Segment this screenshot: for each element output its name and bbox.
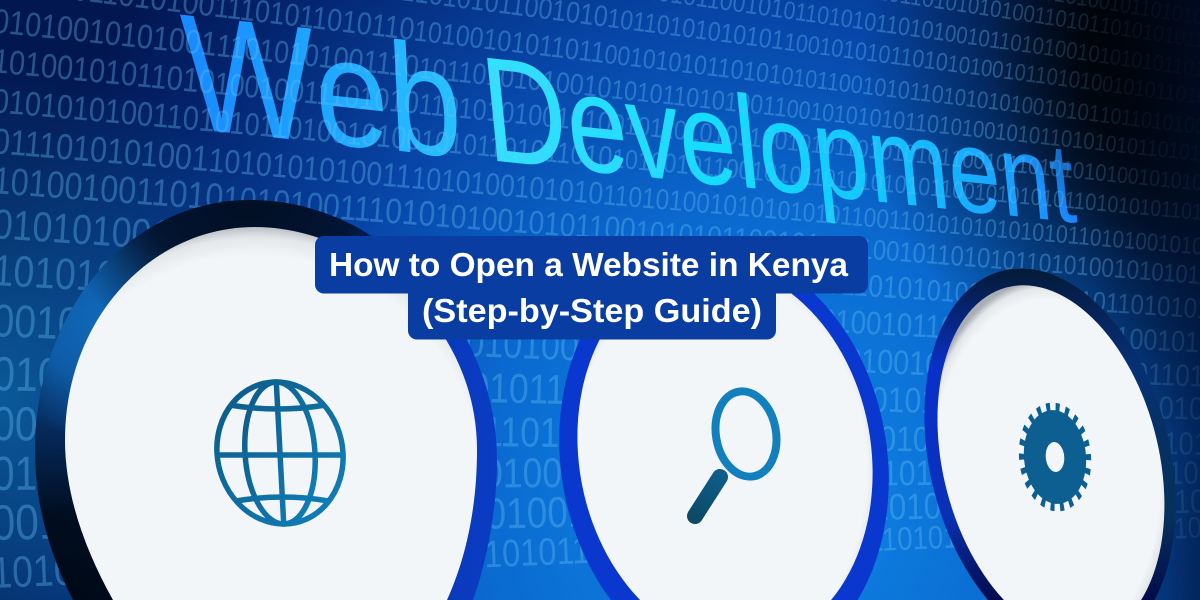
icon: magnifying glass [695, 386, 783, 516]
icon: globe [213, 382, 347, 524]
panel: gear disc [924, 268, 1176, 600]
panel: magnifier disc [559, 247, 889, 600]
ring: right disc [924, 268, 1176, 600]
headline text: (Step-by-Step Guide) [422, 292, 762, 329]
headline text: How to Open a Website in Kenya [329, 246, 849, 283]
headline text [329, 246, 849, 329]
banner backgrounds [315, 236, 868, 340]
panel: globe disc [30, 195, 500, 600]
white disc: middle [577, 264, 873, 600]
white disc: right [937, 285, 1164, 600]
white disc: left [65, 227, 477, 600]
ring: left disc [30, 195, 500, 600]
binary digit rows: 01010100101010101001110101010110100101010110010101101010100101010110110101010 [0, 201, 1200, 329]
headline banner [315, 236, 868, 340]
title: Web Development: Development [474, 24, 1081, 255]
binary digit rows: 0010101011101001010110101010010110110101011010100101010110101001011010 [0, 295, 1200, 398]
icon: gear [1018, 404, 1092, 510]
ring: middle disc [559, 247, 889, 600]
title: Web Development [178, 0, 1081, 255]
